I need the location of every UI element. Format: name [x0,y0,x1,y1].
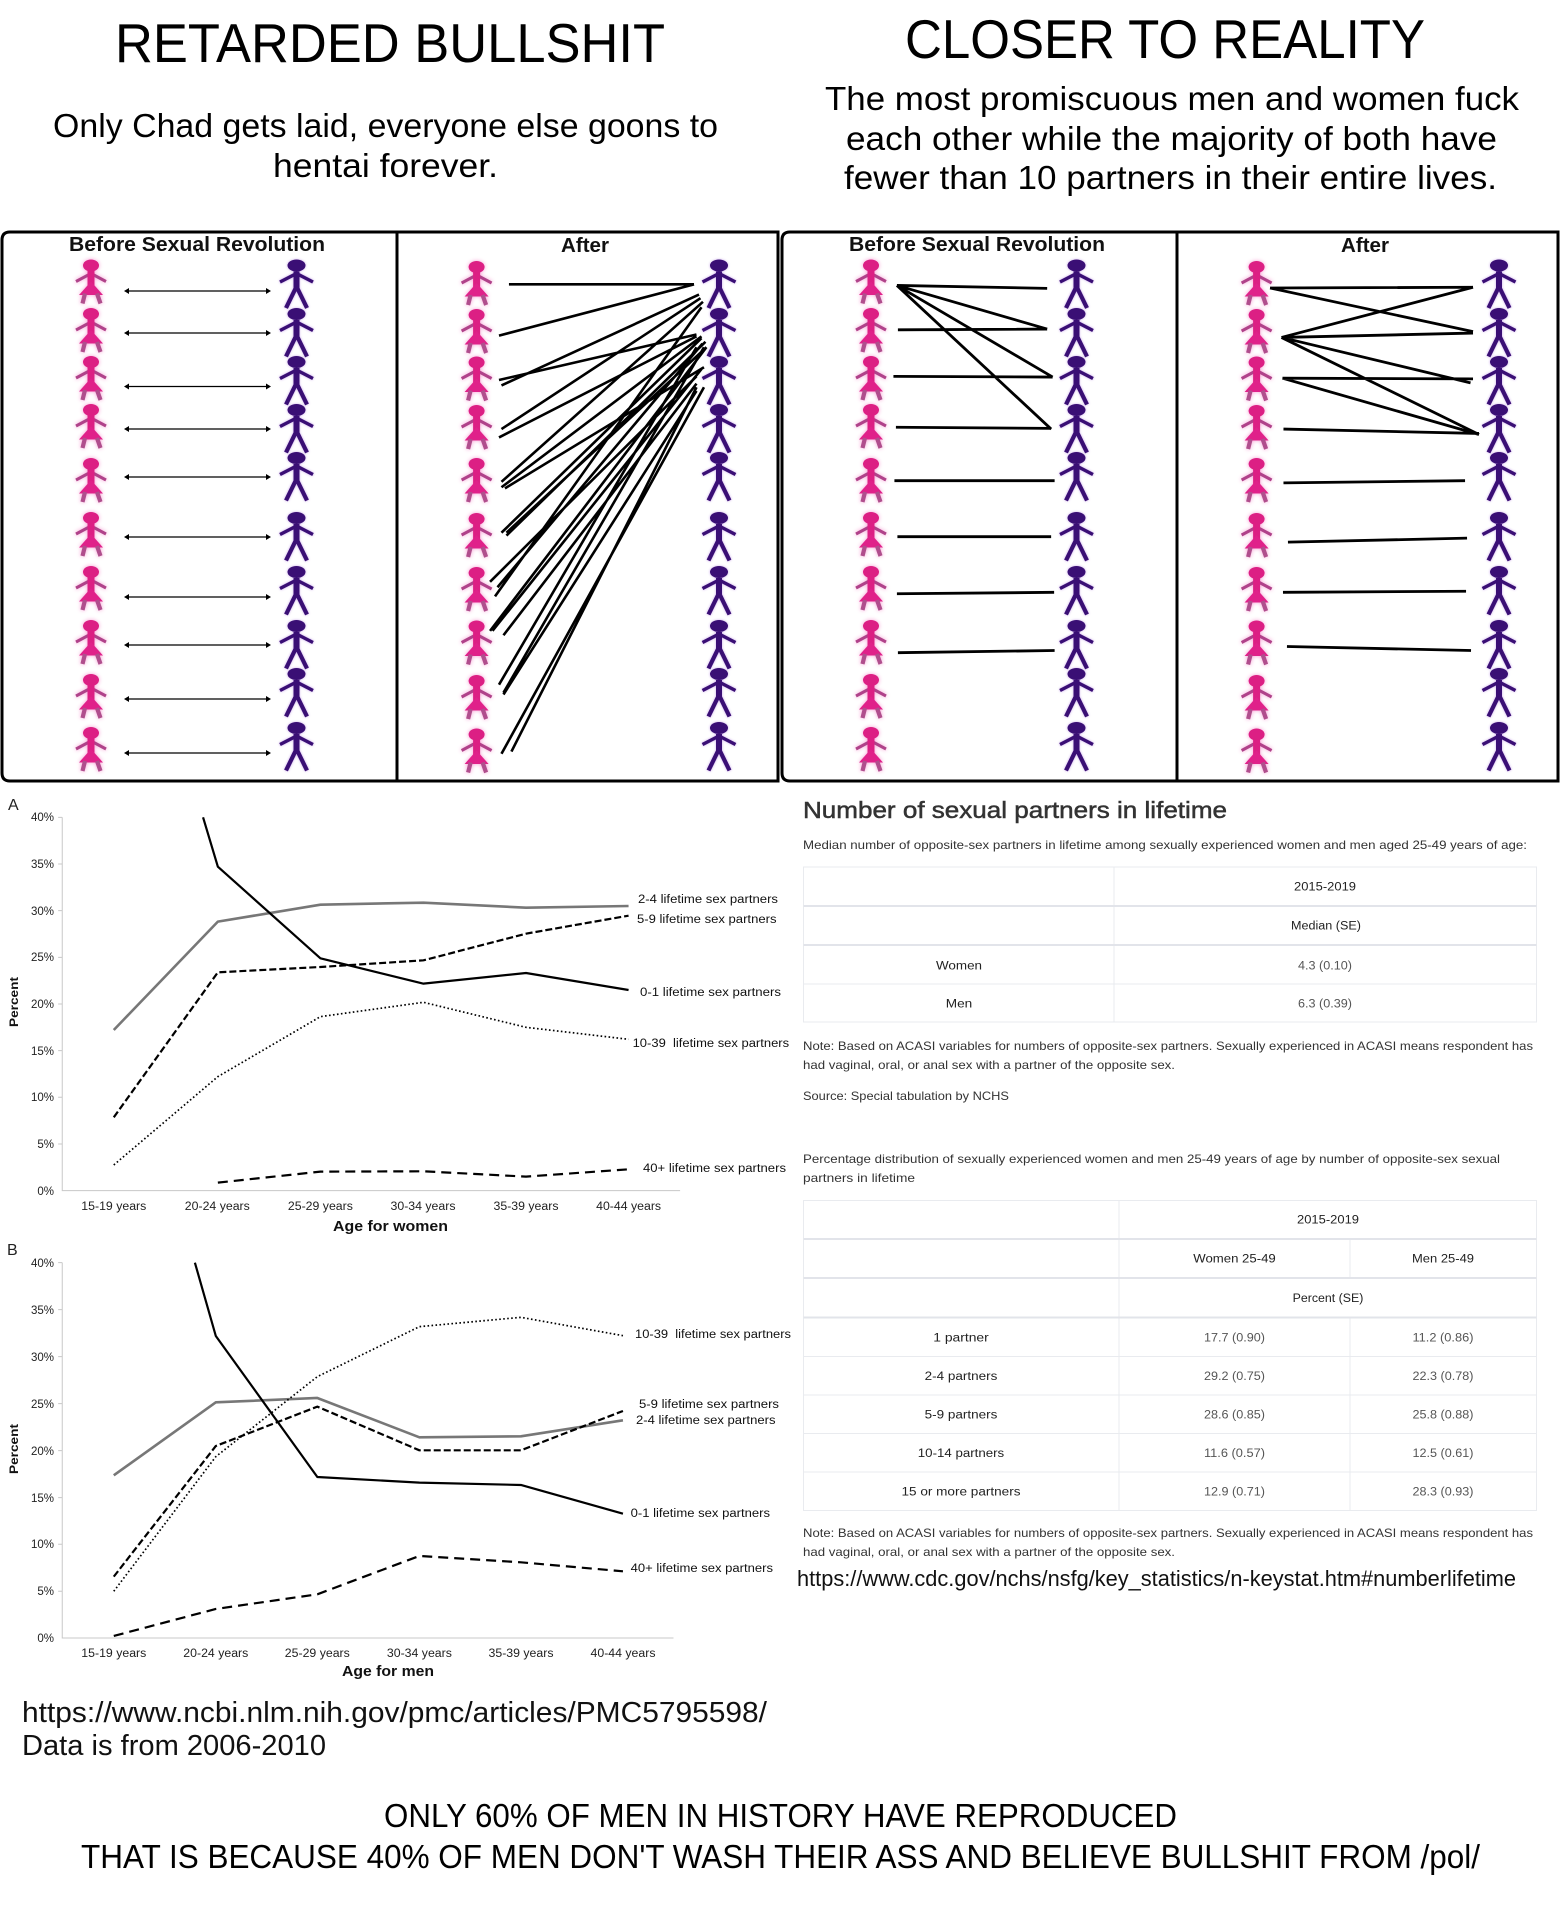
y-axis tick labels: 5% [37,1586,54,1598]
text block: closing statement [81,1797,1481,1875]
table: median partners: Women [936,960,982,972]
figures: men before [1060,260,1093,770]
text block: right column claim: each other while the majority of both have [846,120,1497,157]
panel: left diagram pair [2,232,778,781]
arrows: one-to-one pairings [124,288,271,756]
heading: before sexual revolution: Before Sexual Revolution [69,234,325,256]
y-axis tick labels: 35% [31,859,54,871]
axes [58,817,680,1191]
y-axis tick labels: 15% [31,1046,54,1058]
heading: right column title: CLOSER TO REALITY [905,8,1425,70]
y-axis tick labels: 40% [31,1258,54,1270]
x-axis tick labels: 25-29 years [288,1201,353,1213]
figures: women after [1242,261,1272,772]
x-axis tick labels: 30-34 years [387,1648,452,1660]
table: percentage distribution: 5-9 partners [925,1410,998,1422]
x-axis tick labels: 20-24 years [185,1201,250,1213]
table: median partners: Men [946,998,972,1010]
series labels: 40+ lifetime sex partners [631,1563,773,1575]
text block: percentage distribution intro: partners in lifetime [803,1171,915,1185]
text block: right column claim [825,80,1520,196]
x-axis tick labels: 20-24 years [183,1648,249,1660]
series labels: 0-1 lifetime sex partners [640,987,781,999]
table: percentage distribution: 2015-2019 [1297,1214,1359,1226]
text block: source link for charts: https://www.ncbi.nlm.nih.gov/pmc/articles/PMC5795598/ [22,1697,768,1729]
figures: women before [856,260,886,771]
y-axis tick labels [31,1258,54,1645]
series labels [633,894,789,1175]
table: percentage distribution: 12.5 (0.61) [1412,1448,1474,1460]
series labels [631,1329,791,1575]
y-axis tick labels: 0% [37,1186,54,1198]
table: percentage distribution: 15 or more partners [902,1486,1021,1498]
text block: table note and source: Source: Special tabulation by NCHS [803,1089,1009,1103]
lines: all women connected to few men [490,284,706,754]
table: percentage distribution: 10-14 partners [918,1448,1004,1460]
figures: men after [702,260,736,770]
table: percentage distribution: 28.6 (0.85) [1204,1410,1265,1422]
chart A: women [7,797,789,1235]
text block: left column claim [53,107,718,184]
x-axis title: Age for men [342,1663,434,1680]
table: percentage distribution: 28.3 (0.93) [1412,1486,1474,1498]
series labels: 5-9 lifetime sex partners [637,914,777,926]
table: percentage distribution: 12.9 (0.71) [1204,1486,1265,1498]
figures: men after [1482,260,1516,770]
series labels: 0-1 lifetime sex partners [631,1508,770,1520]
heading: statistics section: Number of sexual partners in lifetime [803,797,1227,823]
table: percentage distribution: 11.2 (0.86) [1412,1332,1474,1344]
axes [58,1263,673,1638]
table: percentage distribution: 25.8 (0.88) [1412,1410,1474,1422]
text block: closing statement: THAT IS BECAUSE 40% OF MEN DON'T WASH THEIR ASS AND BELIEVE BULLSHIT FROM /pol/ [81,1838,1481,1875]
data lines [114,817,629,1183]
y-axis title: Percent [7,977,21,1027]
table: percentage distribution: 17.7 (0.90) [1204,1332,1265,1344]
table: percentage distribution: Percent (SE) [1293,1293,1364,1305]
table: median partners: 4.3 (0.10) [1298,960,1352,972]
x-axis tick labels: 15-19 years [81,1648,147,1660]
text block: left column claim: Only Chad gets laid, everyone else goons to [53,107,718,144]
series labels: 5-9 lifetime sex partners [639,1399,779,1411]
text block: second table note: had vaginal, oral, or anal sex with a partner of the opposite sex. [803,1545,1175,1559]
table: percentage distribution: Women 25-49 [1193,1254,1276,1266]
text block: right column claim: fewer than 10 partners in their entire lives. [844,159,1497,196]
series labels: 10-39 lifetime sex partners [633,1038,789,1050]
text block: left column claim: hentai forever. [273,147,498,184]
x-axis title: Age for women [333,1218,448,1235]
series labels: 2-4 lifetime sex partners [638,894,778,906]
series labels: 10-39 lifetime sex partners [635,1329,791,1341]
table: median partners [804,867,1536,1022]
y-axis tick labels: 15% [31,1493,54,1505]
chart B: men [7,1242,791,1680]
y-axis tick labels [31,812,54,1198]
text block: table note and source: Note: Based on ACASI variables for numbers of opposite-sex partners. Sexually experienced in ACASI means respondent has [803,1039,1533,1053]
data lines [114,1263,623,1636]
text block: percentage distribution intro: Percentage distribution of sexually experienced women and men 25-49 years of age by number of opposite-sex sexual [803,1152,1500,1166]
text block: closing statement: ONLY 60% OF MEN IN HISTORY HAVE REPRODUCED [384,1797,1177,1834]
y-axis tick labels: 30% [31,906,54,918]
table: percentage distribution: 2-4 partners [925,1371,998,1383]
table: percentage distribution: 29.2 (0.75) [1204,1371,1265,1383]
table: percentage distribution: 11.6 (0.57) [1204,1448,1265,1460]
table: percentage distribution: Men 25-49 [1412,1254,1474,1266]
x-axis tick labels: 35-39 years [488,1648,554,1660]
table: percentage distribution: 1 partner [933,1332,989,1344]
heading: after: After [561,235,609,257]
text block: second table note [803,1526,1533,1559]
y-axis tick labels: 10% [31,1539,54,1551]
text block: source link for charts: Data is from 2006-2010 [22,1730,326,1762]
panel letter B: B [7,1242,18,1259]
y-axis tick labels: 5% [37,1139,54,1151]
panel: right diagram pair [782,232,1558,781]
x-axis tick labels: 30-34 years [390,1201,456,1213]
y-axis tick labels: 40% [31,812,54,824]
x-axis tick labels: 40-44 years [590,1648,656,1660]
figures: women before [76,260,106,771]
y-axis tick labels: 35% [31,1305,54,1317]
series labels: 40+ lifetime sex partners [643,1163,786,1175]
x-axis tick labels: 35-39 years [494,1201,559,1213]
x-axis tick labels [81,1201,661,1213]
text block: table note and source: had vaginal, oral, or anal sex with a partner of the opposite sex. [803,1058,1175,1072]
text block: percentage distribution intro [803,1152,1500,1185]
table: median partners: 6.3 (0.39) [1298,998,1352,1010]
x-axis tick labels [81,1648,656,1660]
table: median partners: 2015-2019 [1294,882,1356,894]
heading: after: After [1341,235,1389,257]
y-axis tick labels: 25% [31,952,54,964]
panel letter A: A [8,797,19,814]
y-axis tick labels: 30% [31,1352,54,1364]
x-axis tick labels: 40-44 years [596,1201,661,1213]
series labels: 2-4 lifetime sex partners [636,1415,776,1427]
text block: second table note: Note: Based on ACASI variables for numbers of opposite-sex partners. Sexually experienced in ACASI means respondent has [803,1526,1533,1540]
text block: right column claim: The most promiscuous men and women fuck [825,80,1520,117]
text block: table note and source [803,1039,1533,1103]
heading: before sexual revolution: Before Sexual Revolution [849,234,1105,256]
text block: source link for charts [22,1697,768,1762]
table: percentage distribution [804,1200,1536,1510]
text block: source link for tables: https://www.cdc.gov/nchs/nsfg/key_statistics/n-keystat.htm#numberlifetime [797,1566,1516,1591]
table: median partners: Median (SE) [1291,920,1361,932]
x-axis tick labels: 25-29 years [285,1648,350,1660]
y-axis tick labels: 10% [31,1092,54,1104]
text block: median intro: Median number of opposite-sex partners in lifetime among sexually experienced women and men aged 25-49 years of age: [803,838,1527,852]
lines: after connections [1270,287,1479,651]
heading: left column title: RETARDED BULLSHIT [115,12,665,74]
y-axis tick labels: 20% [31,1446,54,1458]
table: percentage distribution: 22.3 (0.78) [1412,1371,1474,1383]
x-axis tick labels: 15-19 years [81,1201,147,1213]
lines: before connections [893,285,1055,653]
figures: men before [280,260,313,770]
y-axis tick labels: 20% [31,999,54,1011]
figures: women after [462,261,492,772]
y-axis tick labels: 0% [37,1633,54,1645]
y-axis title: Percent [7,1424,21,1474]
y-axis tick labels: 25% [31,1399,54,1411]
